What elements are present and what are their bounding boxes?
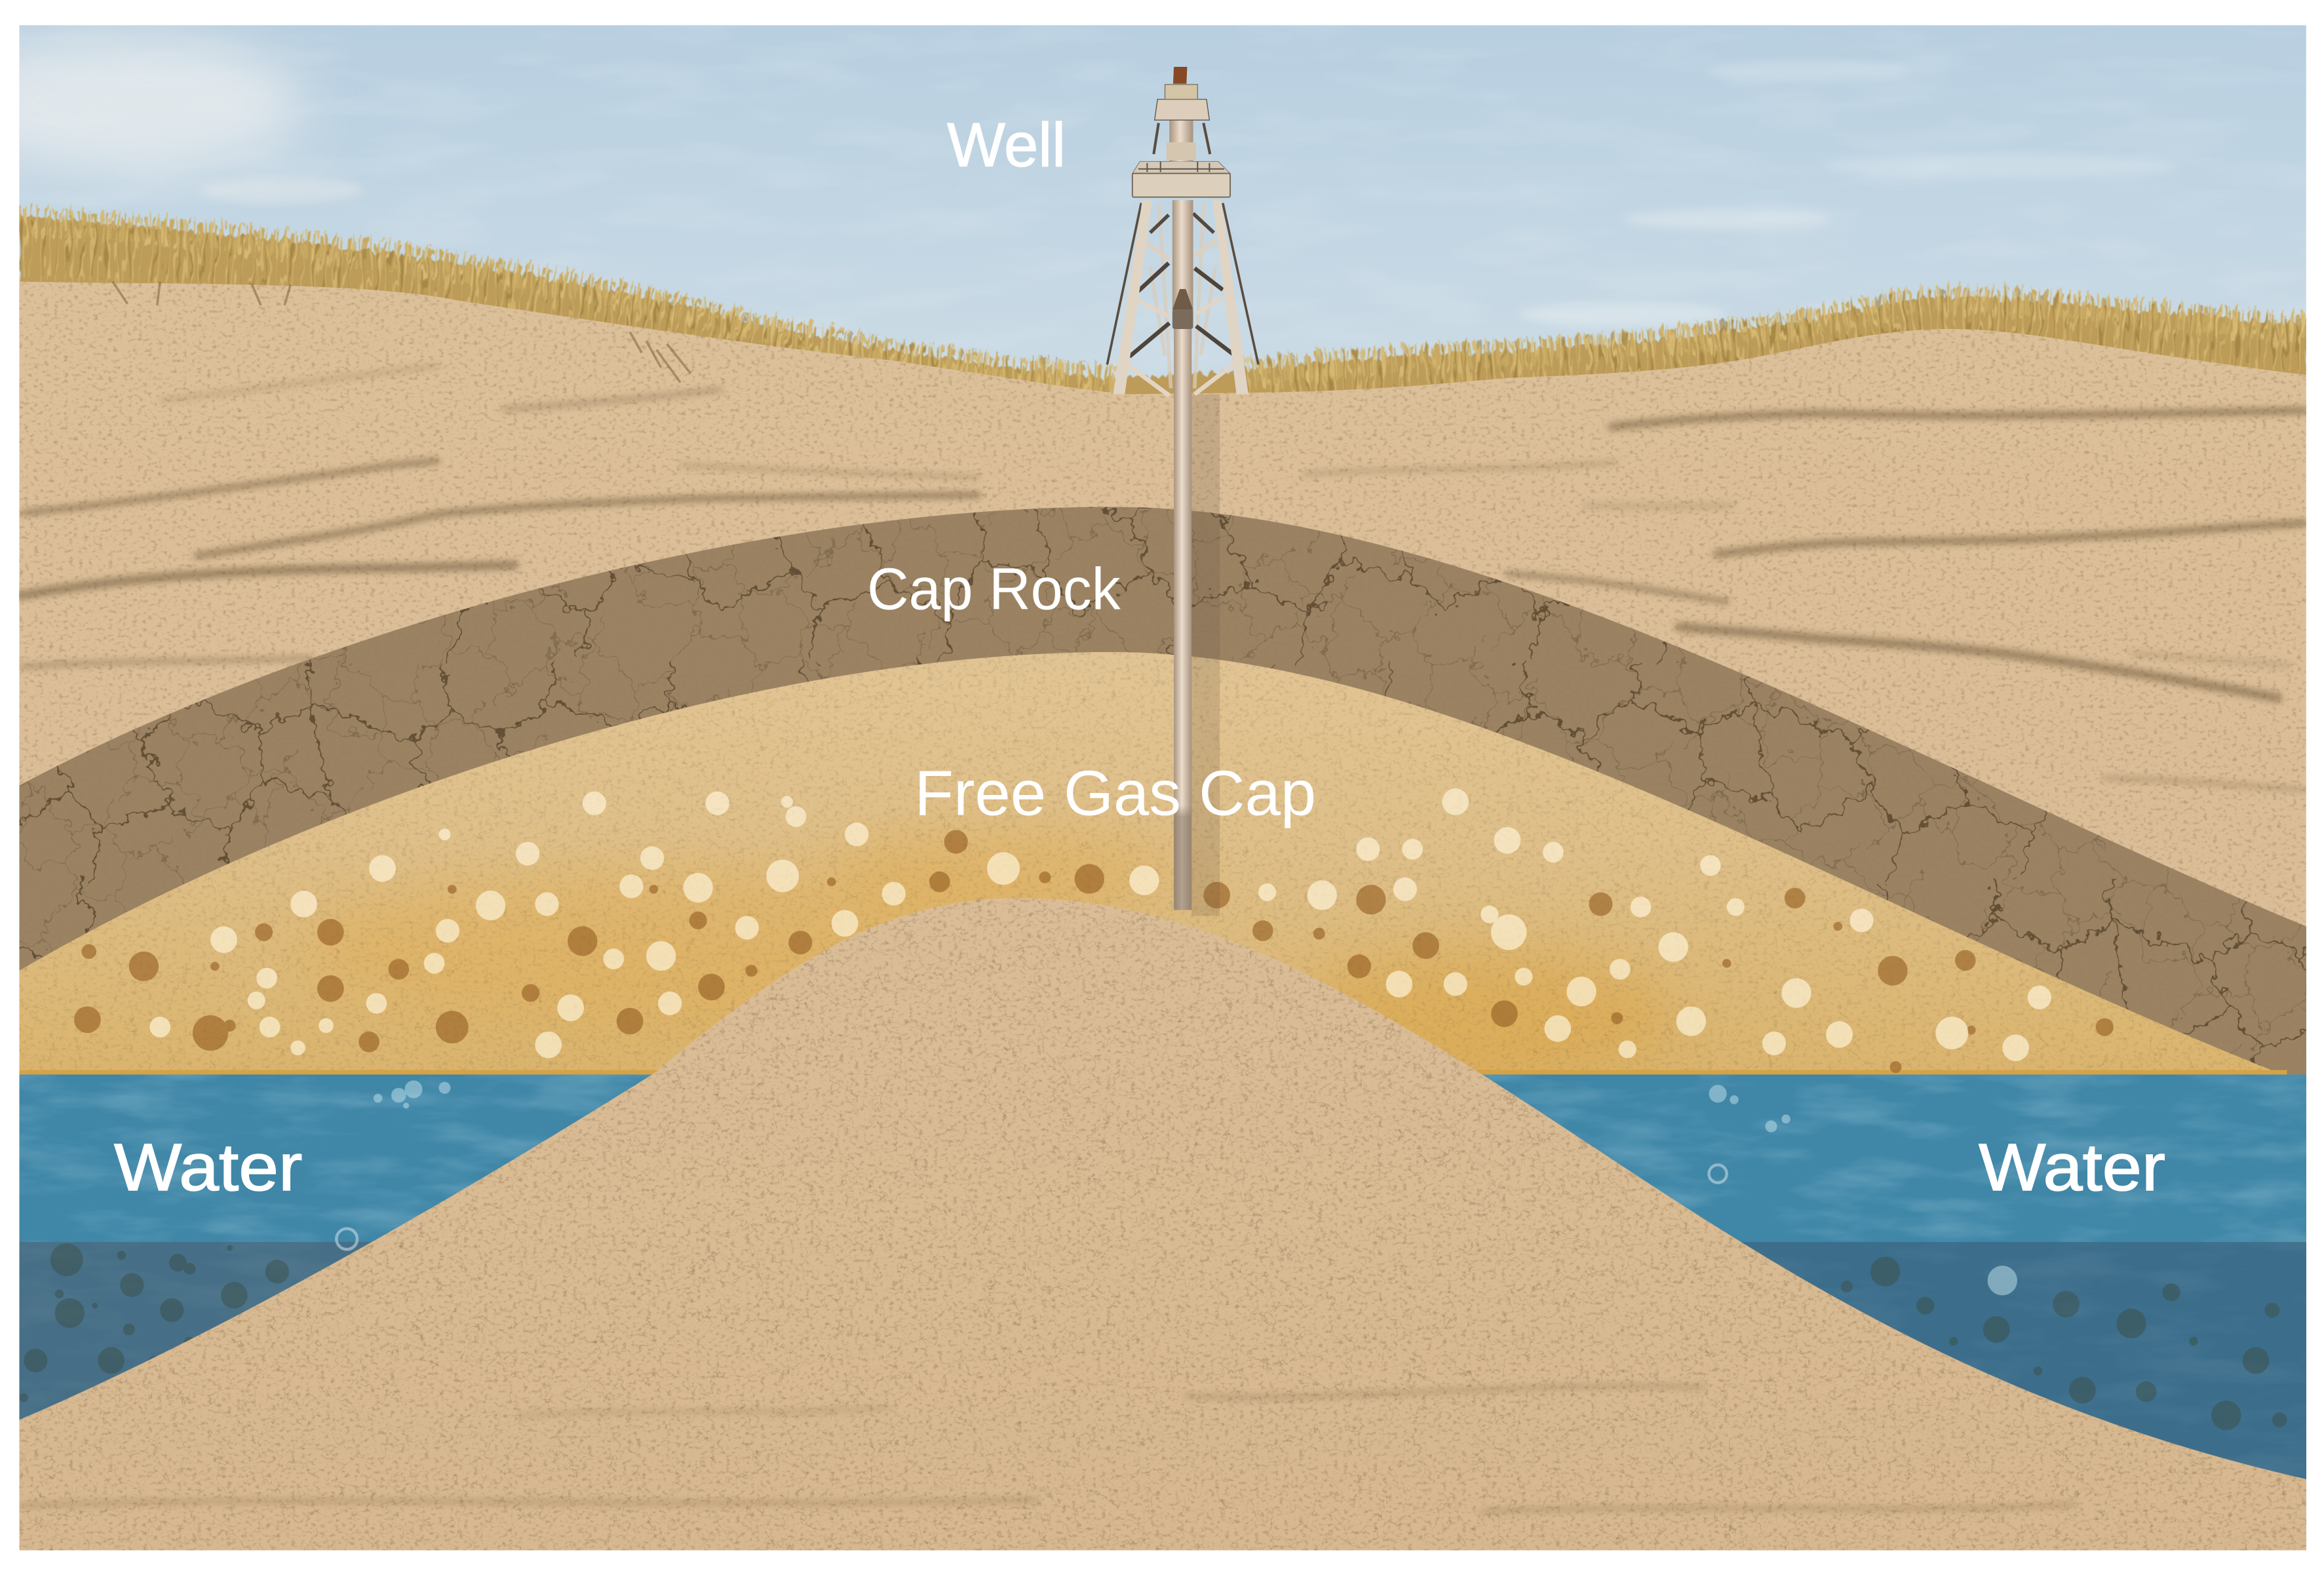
- front legs: [1113, 200, 1152, 395]
- brown crown cap: [1173, 67, 1187, 84]
- well shaft with shadow: [1174, 329, 1220, 916]
- gas layer base line: [19, 1070, 2287, 1074]
- dark bubbles in water: [19, 1243, 2287, 1430]
- free gas cap layer: [0, 637, 2324, 1082]
- fine dome cracks: [0, 889, 2324, 1556]
- grass body: [19, 216, 2306, 408]
- lower sand dome: [0, 889, 2324, 1556]
- brown bubbles: [74, 830, 2114, 1073]
- pipe shadow: [1191, 395, 1220, 916]
- label: Cap Rock: Cap Rock: [867, 556, 1121, 622]
- label: Water right: Water: [1979, 1130, 2165, 1205]
- upper deck: [1155, 100, 1209, 120]
- dome streaks: [19, 1386, 2075, 1512]
- cracks: [0, 475, 2324, 1096]
- braces: [1127, 214, 1235, 396]
- bracket on column: [1172, 289, 1193, 310]
- top block: [1165, 85, 1197, 100]
- label: Water left: Water: [114, 1130, 302, 1205]
- pipe collar: [1172, 310, 1193, 329]
- fine gas layer cracks: [0, 637, 2324, 1082]
- label: Well: Well: [947, 110, 1066, 180]
- darker lower water band right: [1631, 1242, 2306, 1509]
- pipe: [1174, 329, 1191, 910]
- central column: [1172, 200, 1193, 313]
- icon: oil derrick: [1107, 67, 1258, 396]
- sky with clouds: [0, 25, 2306, 440]
- sand streaks: [19, 366, 2306, 790]
- grass roots: [113, 282, 691, 382]
- light gas bubbles: [149, 788, 2051, 1061]
- rear pale legs: [1150, 203, 1215, 388]
- upper column: [1169, 120, 1193, 161]
- cap rock layer: [0, 475, 2324, 1096]
- rear shadow legs: [1107, 123, 1258, 364]
- label: Free Gas Cap: Free Gas Cap: [914, 758, 1316, 829]
- water layer: [19, 1074, 2306, 1509]
- grass on the ridge: [19, 216, 2306, 408]
- grass blades: [19, 220, 2306, 391]
- darker lower water band left: [19, 1242, 464, 1509]
- lower platform: [1133, 161, 1230, 174]
- light bubbles in water: [336, 1081, 2017, 1295]
